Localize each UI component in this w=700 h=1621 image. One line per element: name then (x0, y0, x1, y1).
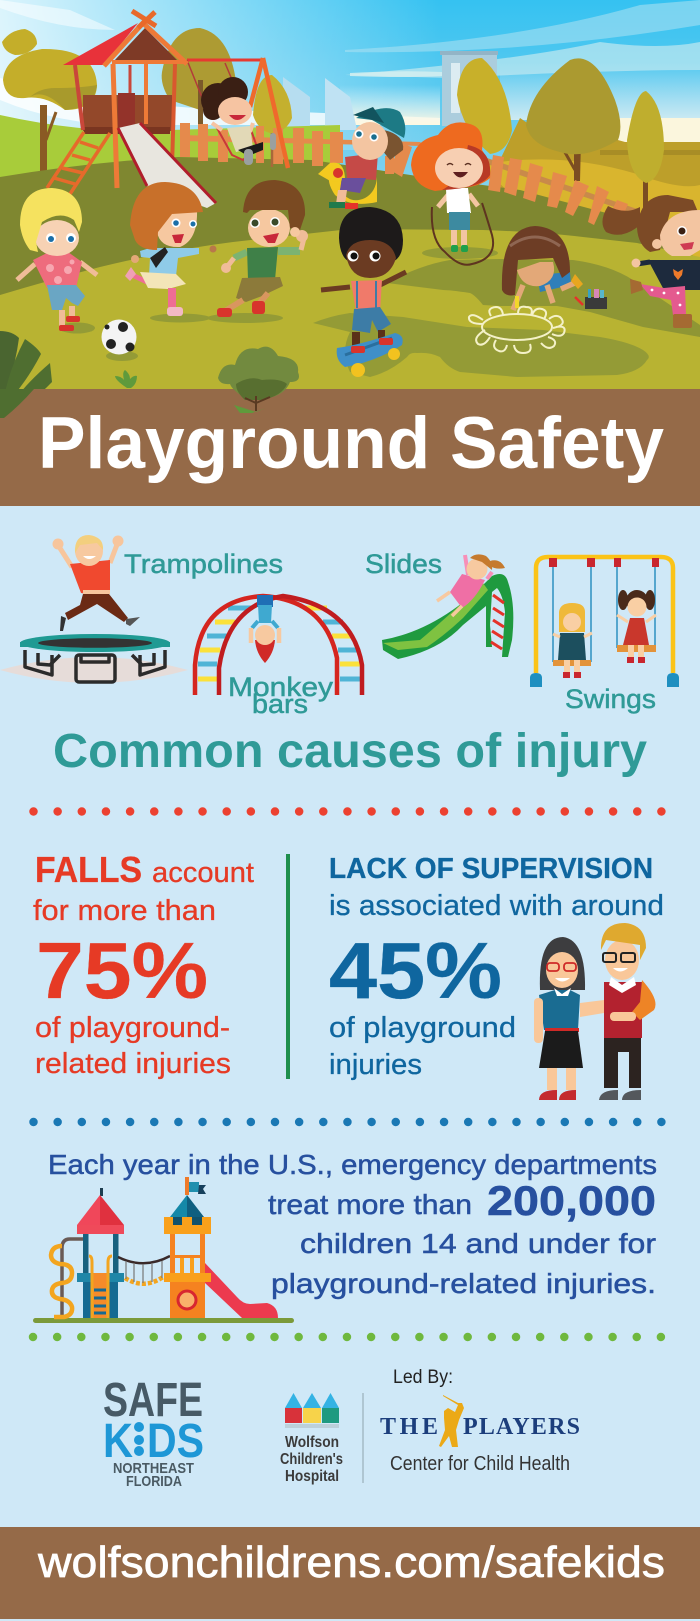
logo: the players center for child health: PLAYERS (463, 1414, 580, 1440)
label: monkey bars second line: bars (252, 689, 308, 719)
number: 45 percent: 45% (329, 926, 502, 1015)
child drawing with chalk (469, 226, 607, 353)
footer banner (0, 1527, 700, 1619)
icon: adults supervising (534, 923, 656, 1100)
tree: behind swing (162, 28, 237, 130)
ground: lower shadow patch (313, 313, 649, 377)
label: trampolines: Trampolines (124, 549, 283, 579)
logo: the players center for child health: Center for Child Health (390, 1453, 570, 1475)
text: for more than: for more than (33, 895, 216, 927)
label: slides: Slides (365, 549, 442, 579)
logo word: kids: K (103, 1415, 133, 1468)
number: 75 percent: 75% (36, 926, 208, 1015)
tree: yellow by building (457, 58, 512, 154)
slide with girl (382, 554, 513, 659)
child: girl with orange hair (125, 182, 216, 322)
man (580, 923, 656, 1100)
child skipping rope (411, 122, 498, 265)
logo text: florida: FLORIDA (126, 1473, 182, 1490)
tree: yellow by swing (253, 75, 292, 133)
building (440, 51, 498, 126)
swing set with two girls (530, 557, 679, 687)
logo: wolfson children's hospital (280, 1393, 343, 1485)
equipment row (0, 535, 679, 719)
chalk sun drawing (469, 307, 565, 353)
swing set (187, 58, 288, 168)
text: related injuries: related injuries (35, 1048, 231, 1080)
heading: common causes of injury: Common causes of injury (53, 725, 647, 778)
panel: falls statistic (33, 849, 254, 1080)
ground: upper shadow patch (387, 259, 700, 337)
play house (47, 11, 216, 208)
tree: left (2, 29, 97, 173)
logo: the players center for child health: THE (380, 1414, 438, 1440)
panel: annual emergency statistic (48, 1149, 657, 1299)
child on rocking duck (318, 107, 405, 209)
text: falls: FALLS (35, 849, 142, 890)
text: is associated with around: is associated with around (329, 890, 664, 922)
logo word: safe: SAFE (103, 1374, 203, 1427)
logo: wolfson children's hospital: Hospital (285, 1468, 339, 1485)
tree: big olive (526, 58, 620, 181)
hills (480, 118, 700, 260)
child: blond boy (17, 188, 97, 334)
text: of playground: of playground (329, 1012, 516, 1044)
child running right (602, 195, 700, 328)
text: lack of supervision: LACK OF SUPERVISION (329, 853, 653, 885)
text: led by: Led By: (393, 1367, 453, 1388)
number: 200,000: 200,000 (487, 1177, 656, 1224)
text: injuries: injuries (329, 1049, 422, 1081)
ground: light grass (0, 229, 700, 392)
trampoline with jumping boy (0, 535, 188, 683)
plant: small sprout (115, 370, 137, 388)
monkey bars (195, 595, 362, 695)
bush (218, 347, 299, 413)
ground: dark grass (0, 157, 700, 392)
child on swing (201, 77, 276, 165)
child: boy in green shirt (207, 180, 308, 323)
plant: leaves over banner (0, 389, 34, 418)
woman (534, 937, 585, 1100)
logo text: northeast: NORTHEAST (113, 1460, 194, 1477)
logo word: kids (103, 1415, 204, 1468)
text: each year: Each year in the U.S., emergency departments (48, 1149, 657, 1180)
text: playground-related injuries: playground-related injuries. (271, 1268, 656, 1299)
logo: wolfson children's hospital: Children's (280, 1451, 343, 1468)
logo: the players center for child health (380, 1395, 580, 1475)
url text: wolfsonchildrens.com/safekids (37, 1538, 665, 1587)
icon: soccer ball (102, 320, 138, 361)
icon: golfer (439, 1395, 464, 1447)
slide (118, 123, 216, 208)
hero illustration: children on a playground (0, 0, 700, 418)
label: swings: Swings (565, 684, 656, 714)
fence (180, 123, 640, 225)
ladder (47, 132, 110, 197)
child on skateboard (321, 207, 406, 377)
title: Playground Safety (38, 403, 664, 484)
text: treat more than: treat more than (268, 1189, 472, 1220)
logo word: kids: DS (147, 1415, 204, 1468)
logo: safe kids northeast florida (103, 1374, 204, 1490)
tree: tall (627, 91, 664, 210)
panel: lack of supervision statistic (329, 853, 664, 1081)
label: monkey bars: Monkey (228, 672, 334, 702)
crayon box (575, 289, 607, 309)
text: of playground-: of playground- (35, 1012, 230, 1044)
logo: wolfson children's hospital: Wolfson (285, 1434, 339, 1451)
title banner (0, 347, 700, 506)
icon: play structure (33, 1177, 294, 1323)
plant: left leaves (0, 331, 52, 418)
text: children 14 and under for: children 14 and under for (300, 1228, 656, 1259)
text: account: account (152, 857, 254, 889)
